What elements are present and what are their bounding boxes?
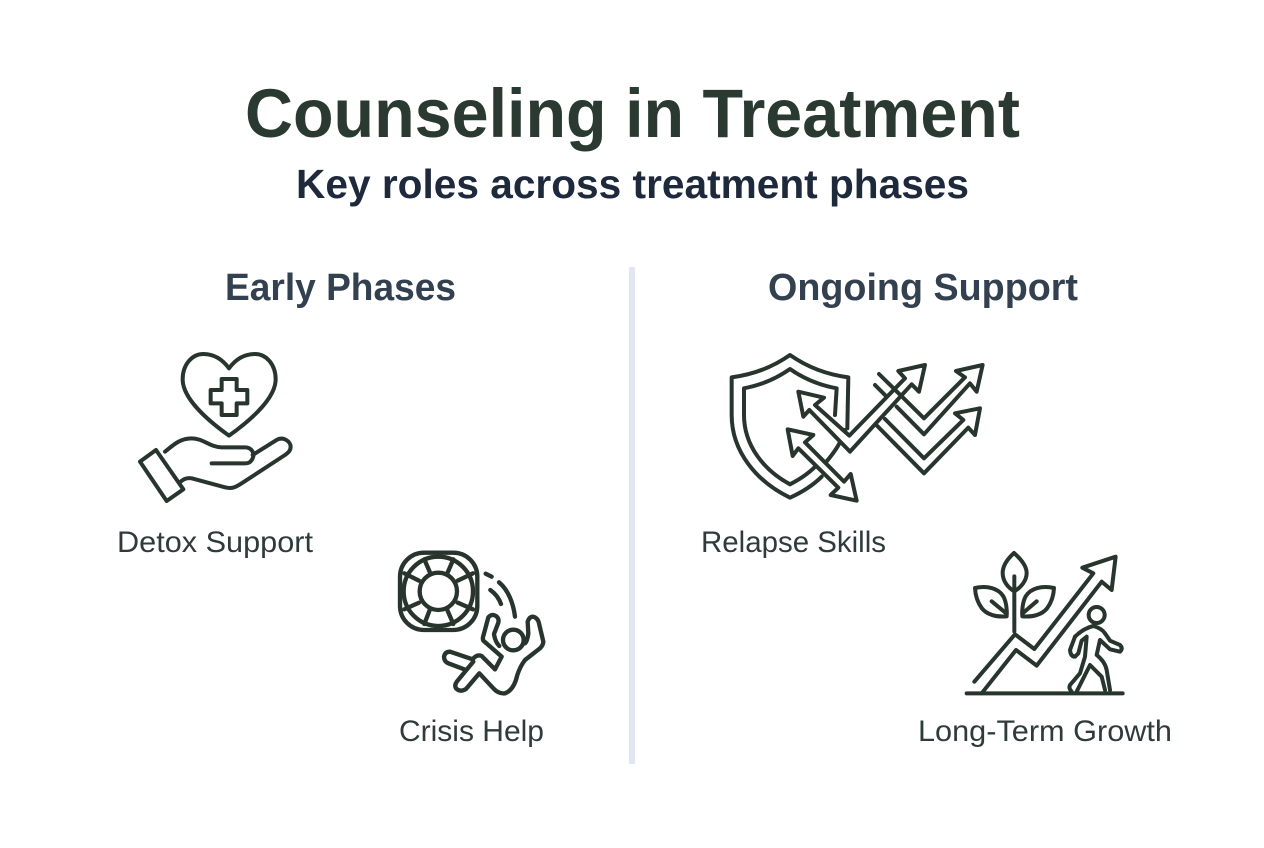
panel: ongoing support — [701, 267, 1172, 748]
heading: early phases: Early Phases — [225, 267, 456, 309]
center divider — [629, 267, 635, 764]
label: crisis help: Crisis Help — [399, 715, 544, 748]
subtitle: Key roles across treatment phases — [296, 161, 969, 207]
panel: early phases — [117, 267, 544, 748]
heading: ongoing support: Ongoing Support — [768, 267, 1078, 309]
icon: plant, arrow and walking person — [967, 553, 1123, 693]
icon: life ring and person — [400, 553, 543, 693]
icon: shield and arrows — [732, 355, 983, 501]
title: Counseling in Treatment — [245, 75, 1020, 152]
icon: hand holding heart — [140, 354, 291, 501]
label: long-term growth: Long-Term Growth — [918, 715, 1172, 748]
label: detox support: Detox Support — [117, 526, 314, 559]
label: relapse skills: Relapse Skills — [701, 526, 886, 559]
